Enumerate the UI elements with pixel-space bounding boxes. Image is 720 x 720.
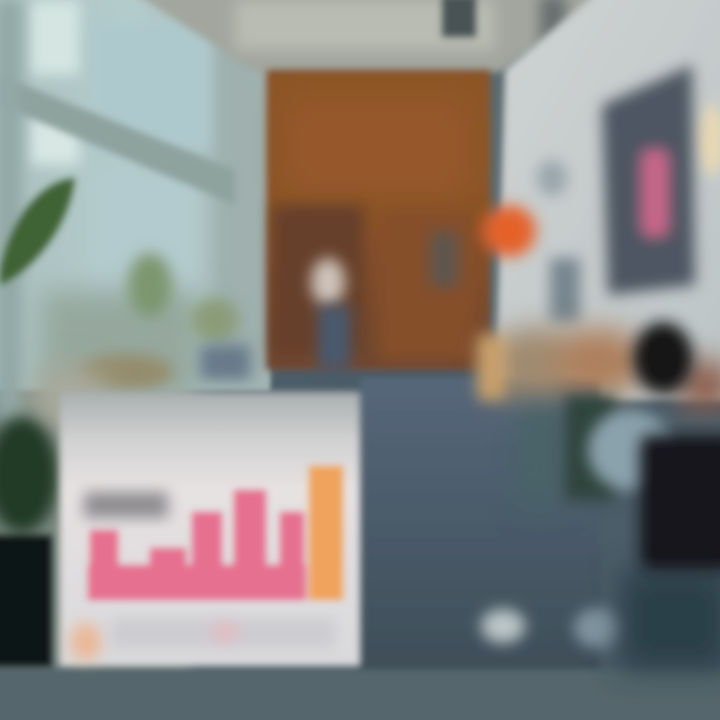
chart board (60, 392, 360, 666)
seated audience (478, 322, 720, 670)
wooden door (266, 70, 490, 370)
chart footer (70, 618, 335, 661)
dark plant pot (0, 535, 52, 667)
right wall (495, 0, 720, 400)
bar chart (88, 466, 343, 600)
person at door (311, 258, 350, 370)
lower background (0, 370, 720, 720)
wall painting (602, 65, 695, 295)
slate floor (360, 378, 600, 670)
ceiling (130, 0, 610, 72)
chart label (84, 492, 168, 518)
left lower background (0, 370, 190, 670)
left window wall (0, 0, 270, 420)
lower floor glare (481, 608, 622, 648)
plants on left (0, 178, 250, 533)
bottom floor strip (0, 670, 720, 720)
orange balloon (482, 205, 536, 257)
